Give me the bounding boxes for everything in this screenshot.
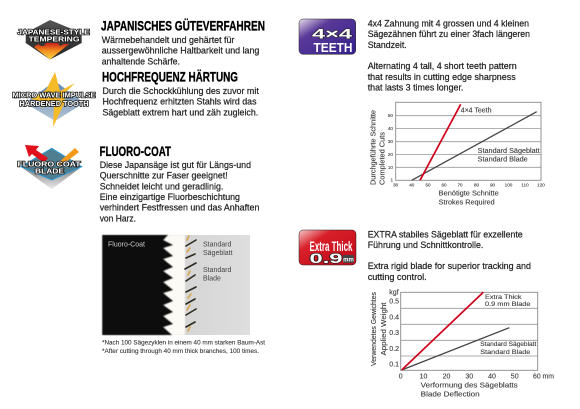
photo: blade comparison: Sägeblatt bbox=[203, 250, 233, 257]
text: Japanese tempering description: Wärmebehandelt und gehärtet für bbox=[102, 35, 234, 45]
photo: blade comparison bbox=[102, 235, 250, 335]
chart: completed cuts vs strokes required: Standard Blade bbox=[478, 156, 528, 163]
photo: blade comparison: Blade bbox=[203, 276, 221, 283]
icon: extra thick badge bbox=[299, 230, 356, 266]
chart: applied weight vs blade deflection: 0.4 bbox=[389, 314, 399, 322]
icon: extra thick badge: 0.9 bbox=[310, 250, 343, 266]
text: 4x4 teeth description: Sägezähnen führt zu einer 3fach längeren bbox=[368, 29, 530, 39]
chart: completed cuts vs strokes required: 100 bbox=[505, 182, 513, 188]
text: Fluoro-Coat description: von Harz. bbox=[100, 213, 136, 223]
chart: applied weight vs blade deflection: Standard Blade bbox=[480, 349, 531, 356]
chart: applied weight vs blade deflection: Blade Deflection bbox=[421, 389, 480, 398]
text: 4x4 teeth description: that lasts 3 times longer. bbox=[368, 82, 463, 92]
chart: completed cuts vs strokes required: 110 bbox=[521, 182, 529, 188]
chart: applied weight vs blade deflection: 10 bbox=[420, 374, 427, 380]
photo: blade comparison: Standard bbox=[203, 267, 232, 274]
icon: 4x4 teeth badge: TEETH bbox=[314, 40, 352, 55]
chart: completed cuts vs strokes required: 40 bbox=[388, 126, 393, 131]
chart: completed cuts vs strokes required: 1 bbox=[390, 178, 393, 182]
chart: applied weight vs blade deflection: Verwendetes Gewichtes bbox=[371, 292, 378, 366]
chart: completed cuts vs strokes required: 60 bbox=[441, 182, 447, 188]
chart: applied weight vs blade deflection bbox=[371, 290, 554, 398]
heading: Japanisches Güteverfahren: JAPANISCHES GÜTEVERFAHREN bbox=[101, 18, 265, 34]
text: 4x4 teeth description bbox=[368, 18, 530, 92]
chart: completed cuts vs strokes required: 40 bbox=[409, 182, 415, 188]
chart: applied weight vs blade deflection: 30 bbox=[465, 374, 473, 380]
chart: completed cuts vs strokes required: 50 bbox=[388, 113, 393, 118]
text: Japanese tempering description: anhaltende Schärfe. bbox=[102, 56, 180, 66]
chart: completed cuts vs strokes required: Completed Cuts bbox=[380, 131, 386, 185]
icon: 4x4 teeth badge bbox=[299, 19, 356, 55]
chart: completed cuts vs strokes required: 90 bbox=[490, 182, 495, 188]
text: hardening description: Hochfrequenz erhitzten Stahls wird das bbox=[102, 97, 257, 107]
icon: microwave impulse hardened tooth: MICRO WAVE IMPULSE bbox=[12, 90, 96, 100]
text: Fluoro-Coat description: Diese Japansäge ist gut für Längs-und bbox=[100, 160, 251, 170]
photo: blade comparison: Fluoro-Coat bbox=[108, 242, 145, 249]
text: Fluoro-Coat description: Schneidet leicht und geradlinig. bbox=[100, 181, 223, 191]
chart: applied weight vs blade deflection: Verformung des Sägeblatts bbox=[421, 381, 518, 390]
chart: completed cuts vs strokes required: 80 bbox=[474, 182, 479, 188]
chart: completed cuts vs strokes required: Strokes Required bbox=[439, 199, 495, 206]
text: hardening description: Sägeblatt extrem hart und zäh zugleich. bbox=[102, 107, 258, 117]
chart: completed cuts vs strokes required bbox=[370, 102, 545, 206]
chart: applied weight vs blade deflection: 0.2 bbox=[389, 346, 399, 353]
text: footnotes: *Nach 100 Sägezyklen in einem 40 mm starken Baum-Ast bbox=[102, 340, 265, 346]
text: 4x4 teeth description: that results in cutting edge sharpness bbox=[368, 72, 516, 82]
chart: completed cuts vs strokes required: 70 bbox=[457, 182, 463, 188]
icon: Japanese-style tempering: TEMPERING bbox=[28, 34, 80, 44]
text: Japanese tempering description bbox=[102, 35, 259, 66]
chart: completed cuts vs strokes required: Standard Sägeblatt bbox=[478, 148, 540, 155]
text: extra thick description: Extra rigid blade for superior tracking and bbox=[368, 261, 531, 271]
icon: fluoro coat blade: BLADE bbox=[35, 167, 64, 176]
icon: extra thick badge: Extra Thick bbox=[310, 238, 353, 254]
icon: microwave impulse hardened tooth: HARDENED TOOTH bbox=[20, 99, 88, 108]
icon: Japanese-style tempering bbox=[18, 20, 90, 60]
text: extra thick description: cutting control. bbox=[368, 272, 427, 282]
chart: applied weight vs blade deflection: 0 bbox=[399, 374, 403, 380]
text: footnotes: *After cutting through 40 mm thick branches, 100 times. bbox=[102, 348, 259, 355]
chart: applied weight vs blade deflection: 0.1 bbox=[389, 362, 399, 368]
chart: applied weight vs blade deflection: 20 bbox=[443, 374, 450, 380]
icon: 4x4 teeth badge: 4×4 bbox=[312, 26, 352, 42]
chart: applied weight vs blade deflection: Applied Weight bbox=[381, 302, 388, 356]
chart: applied weight vs blade deflection: kgf bbox=[389, 290, 399, 296]
chart: applied weight vs blade deflection: 0.9 mm Blade bbox=[485, 301, 531, 308]
icon: fluoro coat blade: FLUORO COAT bbox=[18, 159, 81, 168]
chart: applied weight vs blade deflection: 50 bbox=[511, 374, 519, 380]
chart: applied weight vs blade deflection: 60 mm bbox=[533, 374, 554, 380]
chart: applied weight vs blade deflection: 0.3 bbox=[389, 330, 399, 337]
icon: Japanese-style tempering: JAPANESE-STYLE bbox=[18, 28, 90, 36]
text: Fluoro-Coat description: Querschnitte zur Faser geeignet! bbox=[100, 171, 228, 181]
text: Fluoro-Coat description: Eine einzigartige Fluorbeschichtung bbox=[100, 192, 240, 202]
text: 4x4 teeth description: 4x4 Zahnung mit 4 grossen und 4 kleinen bbox=[368, 18, 529, 28]
chart: completed cuts vs strokes required: 10 bbox=[388, 165, 393, 170]
photo: blade comparison: Standard bbox=[203, 242, 232, 249]
chart: completed cuts vs strokes required: 120 bbox=[537, 182, 545, 188]
chart: completed cuts vs strokes required: Benötigte Schnitte bbox=[439, 190, 499, 197]
chart: completed cuts vs strokes required: 30 bbox=[388, 139, 393, 144]
chart: completed cuts vs strokes required: 4×4 Teeth bbox=[461, 107, 492, 114]
text: extra thick description: Führung und Schnittkontrolle. bbox=[368, 240, 483, 250]
chart: completed cuts vs strokes required: 20 bbox=[388, 152, 393, 157]
text: extra thick description bbox=[368, 229, 531, 282]
icon: fluoro coat blade bbox=[18, 145, 82, 189]
chart: applied weight vs blade deflection: 40 bbox=[488, 374, 496, 380]
icon: extra thick badge: mm bbox=[343, 258, 354, 264]
text: extra thick description: EXTRA stabiles Sägeblatt für exzellente bbox=[368, 229, 523, 239]
text: 4x4 teeth description: Alternating 4 tall, 4 short teeth pattern bbox=[368, 61, 517, 71]
heading: Hochfrequenz Härtung: HOCHFREQUENZ HÄRTUNG bbox=[102, 68, 238, 84]
text: Fluoro-Coat description: verhindert Festfressen und das Anhaften bbox=[100, 203, 259, 213]
text: 4x4 teeth description: Standzeit. bbox=[368, 40, 407, 50]
text: Fluoro-Coat description bbox=[100, 160, 259, 223]
text: hardening description bbox=[102, 86, 259, 117]
icon: microwave impulse hardened tooth bbox=[12, 72, 96, 127]
chart: applied weight vs blade deflection: Standard Sägeblatt bbox=[480, 341, 536, 348]
heading: Fluoro-Coat: FLUORO-COAT bbox=[100, 143, 171, 159]
text: Japanese tempering description: aussergewöhnliche Haltbarkeit und lang bbox=[102, 46, 259, 56]
chart: applied weight vs blade deflection: Extra Thick bbox=[485, 294, 522, 301]
text: hardening description: Durch die Schockkühlung des zuvor mit bbox=[102, 86, 259, 96]
chart: completed cuts vs strokes required: 50 bbox=[425, 182, 431, 188]
chart: completed cuts vs strokes required: 30 bbox=[393, 182, 399, 188]
chart: completed cuts vs strokes required: Durchgeführte Schnitte bbox=[370, 110, 378, 185]
chart: applied weight vs blade deflection: 0.5 bbox=[389, 298, 399, 306]
text: footnotes bbox=[102, 340, 265, 355]
